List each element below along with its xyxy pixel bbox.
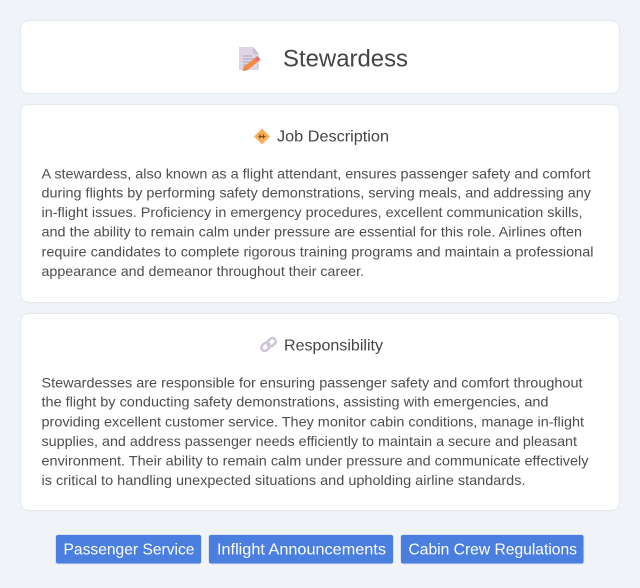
- text block: job description: [42, 165, 594, 279]
- tag: cabin crew regulations: Cabin Crew Regulations: [408, 542, 577, 558]
- icon: document with pencil: [239, 47, 260, 71]
- text block: responsibility: environment. Their ability to remain calm under pressure and communicate effectively: [42, 452, 588, 468]
- panel: title card: [20, 20, 620, 94]
- text block: job description: appearance and demeanor throughout their career.: [42, 263, 364, 279]
- heading: job description: Job Description: [277, 128, 389, 146]
- text block: job description: and the ability to remain calm under pressure are essential for this role. Airlines often: [42, 224, 582, 240]
- text block: job description: A stewardess, also known as a flight attendant, ensures passenger safety and comfort: [42, 165, 591, 181]
- text block: responsibility: providing excellent customer service. They monitor cabin conditions, manage in-flight: [42, 413, 584, 429]
- text block: job description: during flights by performing safety demonstrations, serving meals, and addressing any: [42, 185, 591, 201]
- icon: chain link: [260, 337, 277, 352]
- icon: orange diamond: [254, 129, 270, 144]
- text block: responsibility: Stewardesses are responsible for ensuring passenger safety and comfort throughout: [42, 374, 583, 390]
- tag: inflight announcements: [208, 534, 394, 564]
- text block: responsibility: is critical to handling unexpected situations and upholding airline standards.: [42, 472, 526, 488]
- text block: job description: require candidates to complete rigorous training programs and maintain a professional: [42, 244, 594, 260]
- title: Stewardess: [283, 46, 408, 72]
- panel: responsibility: [20, 314, 620, 510]
- tag: passenger service: [56, 534, 202, 564]
- tag: cabin crew regulations: [400, 534, 584, 564]
- panel: job description: [20, 104, 620, 302]
- text block: responsibility: the flight by conducting safety demonstrations, assisting with emergencies, and: [42, 394, 548, 410]
- heading: responsibility: Responsibility: [284, 338, 383, 355]
- text block: job description: in-flight issues. Proficiency in emergency procedures, excellent communication skills,: [42, 204, 582, 220]
- text block: responsibility: [42, 374, 588, 488]
- tag: passenger service: Passenger Service: [64, 542, 195, 558]
- tag: inflight announcements: Inflight Announcements: [217, 542, 386, 558]
- text block: responsibility: supplies, and address passenger needs efficiently to maintain a secure and pleasant: [42, 433, 577, 449]
